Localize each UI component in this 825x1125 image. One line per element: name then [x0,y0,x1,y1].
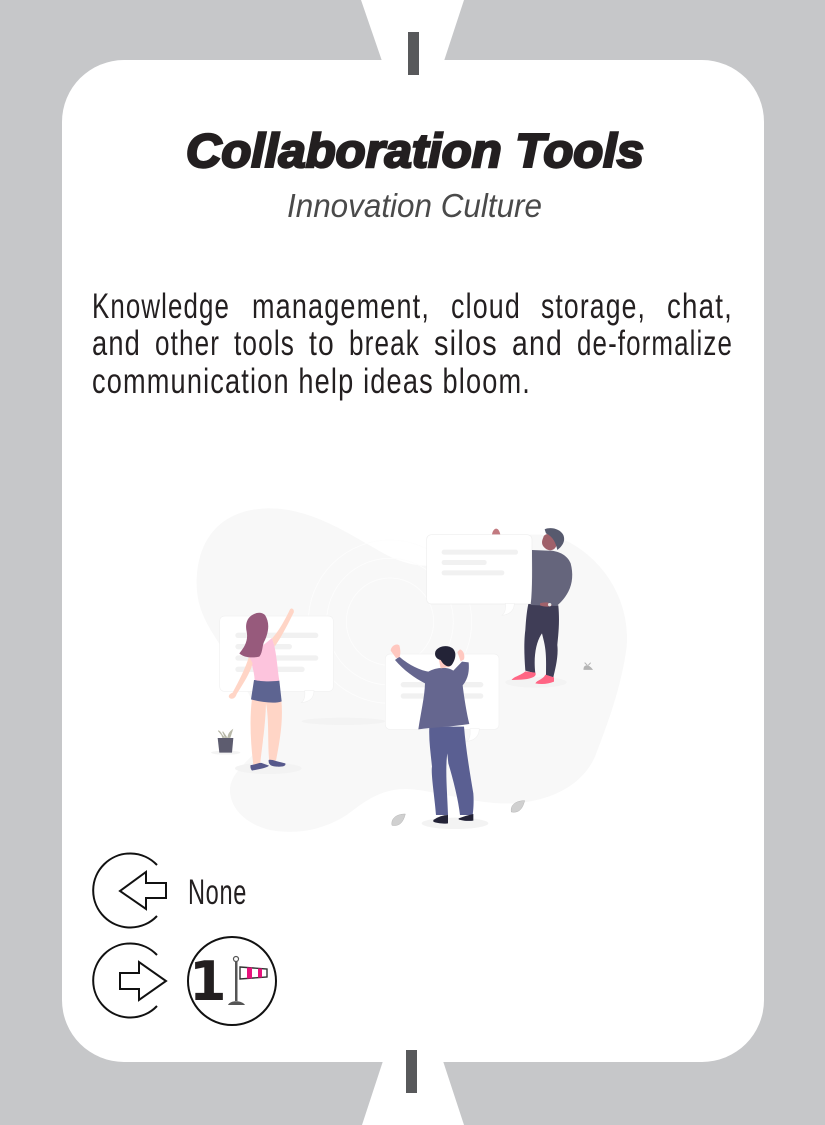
description text: chat, [667,287,733,326]
message card: left [220,616,333,703]
top notch marker [408,32,419,75]
bottom notch marker [406,1050,417,1093]
leaf right [511,801,525,812]
description text: Knowledge [92,287,230,326]
description text: and [512,324,563,363]
description text: de-formalize [577,324,733,363]
description text: and [92,324,141,363]
concentric rings [308,540,472,703]
prerequisite label: None [188,873,247,912]
description text: communication help ideas bloom. [92,362,531,401]
description text: storage, [541,287,646,326]
small plant [584,663,592,669]
figure: man with hands in pocket [512,528,572,684]
icon: level 1 windsock badge: 1 [189,950,227,1013]
message card: centre [385,654,499,741]
potted plant [218,730,233,753]
icon: outgoing arrow [93,944,166,1018]
floor shadows [211,677,567,829]
description text: break [349,324,420,363]
description text: cloud [451,287,521,326]
illustration: team at message boards [197,508,627,832]
description text: silos [434,324,498,363]
description text [92,287,733,401]
title: Collaboration Tools [186,124,644,177]
background blob [197,508,627,832]
subtitle: Innovation Culture [287,187,542,224]
description text: tools [234,324,295,363]
icon: level 1 windsock badge [188,937,276,1025]
icon: incoming arrow [93,854,166,928]
message card: top right [427,529,532,615]
description text: other [155,324,220,363]
figure: man in suit [391,644,474,824]
figure: woman [229,609,294,771]
description text: to [309,324,335,363]
leaf left [392,814,405,826]
description text: management, [252,287,430,326]
